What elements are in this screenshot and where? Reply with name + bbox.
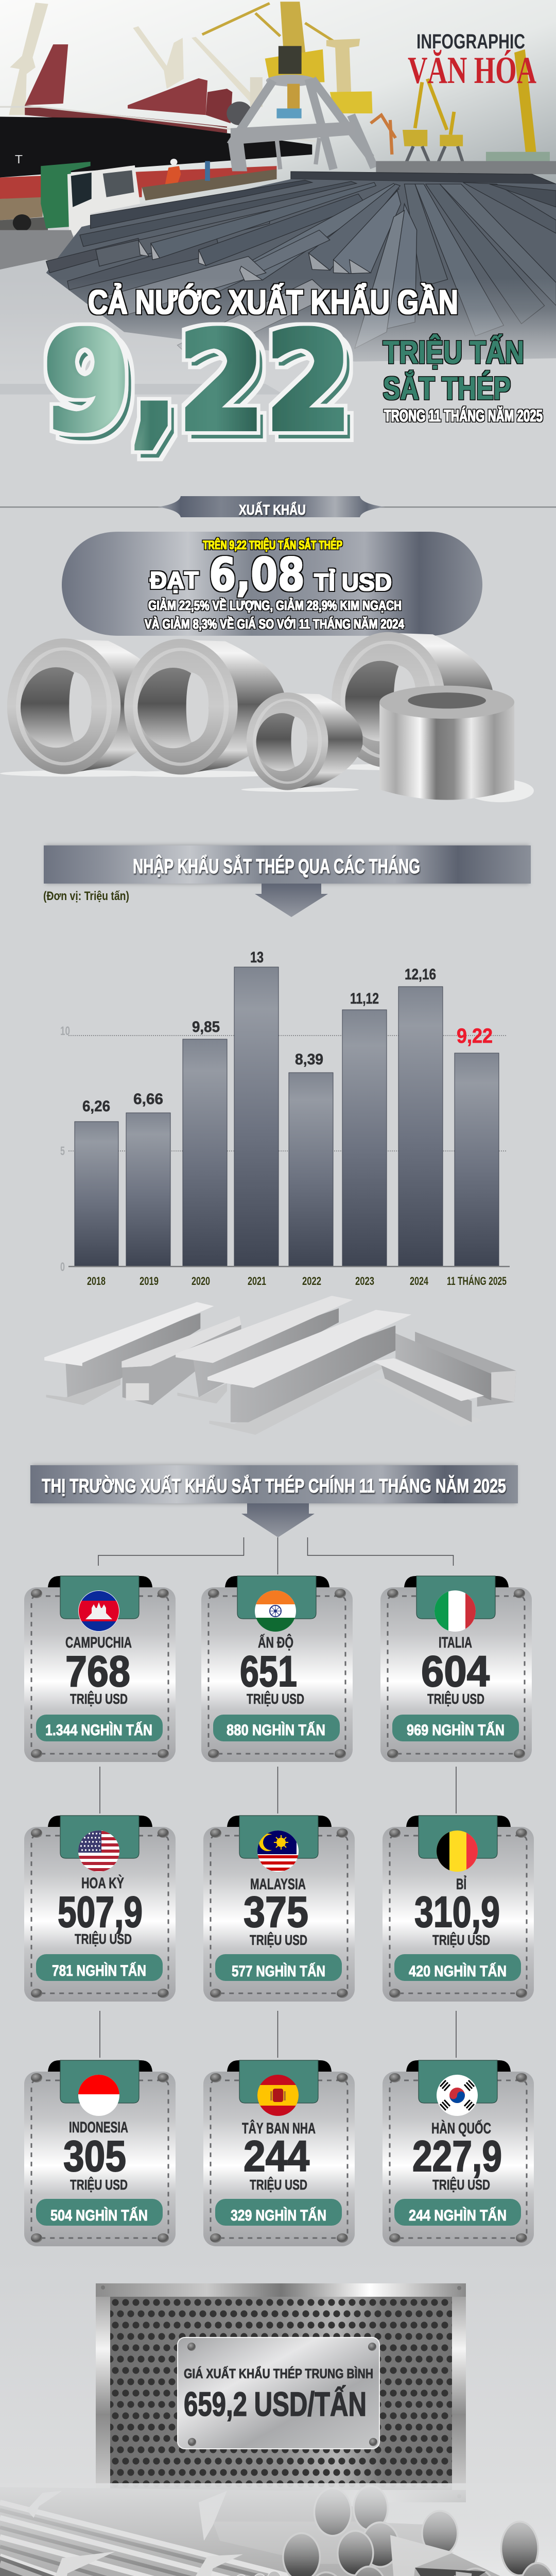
- rod bundle: [222, 2571, 295, 2576]
- card: Hoa Kỳ: 507,9: [58, 1888, 143, 1936]
- section heading: imports by period: [44, 845, 531, 917]
- section heading: imports by period: NHẬP KHẨU SẮT THÉP QUA CÁC THÁNG: [133, 854, 420, 878]
- year labels: [87, 1275, 507, 1287]
- ship: [0, 44, 316, 199]
- unit text: [383, 335, 543, 425]
- card: Hoa Kỳ: 781 NGHÌN TẤN: [52, 1962, 146, 1979]
- flag: India: [255, 1590, 296, 1632]
- section heading: main export markets: [30, 1465, 518, 1537]
- price plate: [178, 2337, 379, 2449]
- illustration: steel beams: [44, 1296, 516, 1435]
- card: Hàn Quốc: [383, 2060, 534, 2246]
- card: Italia: 969 NGHÌN TẤN: [407, 1721, 505, 1739]
- hero photo: steel bars at the port: [0, 0, 556, 395]
- top fade over pipes: [0, 2483, 556, 2571]
- trucks and workers: [0, 159, 276, 273]
- axis labels and grid: 5: [60, 1144, 65, 1158]
- flag: Belgium: [437, 1831, 478, 1872]
- title: CẢ NƯỚC XUẤT KHẨU GẦN: [88, 283, 458, 321]
- price plate: GIÁ XUẤT KHẨU THÉP TRUNG BÌNH: [184, 2366, 373, 2381]
- bar chart: [60, 949, 510, 1287]
- card: Malaysia: 577 NGHÌN TẤN: [232, 1962, 325, 1980]
- card: Italia: TRIỆU USD: [427, 1691, 484, 1707]
- big number 9,22: 9,22: [43, 303, 352, 461]
- value labels: [82, 949, 493, 1115]
- card: Campuchia: CAMPUCHIA: [65, 1634, 132, 1651]
- year labels: 2019: [140, 1275, 159, 1287]
- card: Ấn Độ: 880 NGHÌN TẤN: [227, 1721, 325, 1739]
- unit text: TRIỆU TẤN: [383, 335, 524, 370]
- value labels: 12,16: [405, 966, 436, 983]
- round pipes: [283, 2486, 556, 2576]
- card: Italia: 604: [421, 1647, 490, 1696]
- card: Malaysia: [203, 1816, 355, 2002]
- card: Malaysia: 375: [244, 1888, 308, 1936]
- card: Hoa Kỳ: TRIỆU USD: [75, 1931, 132, 1947]
- flag: South Korea: [437, 2075, 478, 2116]
- panel: export value: ĐẠT: [150, 567, 199, 594]
- port cranes: [202, 2, 556, 174]
- card: Tây Ban Nha: 244: [244, 2132, 309, 2180]
- card: Hàn Quốc: TRIỆU USD: [432, 2177, 490, 2193]
- ship cranes: [9, 3, 263, 115]
- flag: Spain: [257, 2075, 299, 2116]
- year labels: 2024: [410, 1275, 429, 1287]
- section heading: xuất khẩu: XUẤT KHẨU: [239, 502, 306, 518]
- axis labels and grid: [60, 1024, 507, 1274]
- lower background: [0, 2257, 556, 2576]
- value labels: 11,12: [350, 990, 379, 1007]
- year labels: 2022: [302, 1275, 321, 1287]
- panel: export value: TRÊN 9,22 TRIỆU TẤN SẮT THÉP: [203, 538, 342, 552]
- metal straps: [19, 2491, 243, 2576]
- card: Hàn Quốc: 244 NGHÌN TẤN: [409, 2207, 507, 2224]
- card: Tây Ban Nha: [203, 2060, 355, 2246]
- year labels: 2020: [192, 1275, 210, 1287]
- panel: export value: GIẢM 22,5% VỀ LƯỢNG, GIẢM 28,9% KIM NGẠCH: [148, 598, 402, 613]
- panel: export value: TỈ USD: [314, 569, 392, 596]
- title: [43, 283, 543, 461]
- panel: perforated metal frame: [96, 2283, 466, 2502]
- axis labels and grid: 0: [60, 1260, 65, 1274]
- flag: Malaysia: [257, 1831, 299, 1872]
- connector lines: [98, 1537, 456, 2058]
- channel bars: [390, 2535, 486, 2576]
- round bars at back: [0, 2487, 556, 2576]
- card: Indonesia: INDONESIA: [69, 2119, 128, 2136]
- value labels: 9,22: [457, 1025, 493, 1047]
- ship: T: [15, 153, 23, 166]
- value labels: 9,85: [192, 1019, 220, 1036]
- unit text: SẮT THÉP: [383, 371, 511, 406]
- flag: Italy: [435, 1590, 476, 1632]
- left steel bars, rebar and ties: [0, 2556, 305, 2576]
- card: Bỉ: 420 NGHÌN TẤN: [409, 1962, 507, 1980]
- price plate: 659,2 USD/TẤN: [184, 2385, 367, 2423]
- flag: Cambodia: [78, 1590, 119, 1632]
- card: Hoa Kỳ: HOA KỲ: [81, 1874, 124, 1892]
- card: Ấn Độ: TRIỆU USD: [247, 1691, 304, 1707]
- axis labels and grid: 10: [60, 1024, 70, 1038]
- card: Hàn Quốc: HÀN QUỐC: [431, 2120, 491, 2137]
- card: Bỉ: BỈ: [456, 1875, 466, 1893]
- panel: export value: VÀ GIẢM 8,3% VỀ GIÁ SO VỚI 11 THÁNG NĂM 2024: [145, 616, 404, 632]
- illustration: stacked steel pipes and bars: [0, 2486, 556, 2576]
- section heading: xuất khẩu: [0, 496, 556, 518]
- card: Indonesia: 504 NGHÌN TẤN: [50, 2207, 148, 2224]
- steel bars: [0, 172, 556, 395]
- card: Campuchia: [24, 1576, 176, 1762]
- hero fade into background: [0, 278, 556, 384]
- card: Campuchia: TRIỆU USD: [70, 1691, 128, 1707]
- card: Ấn Độ: 651: [240, 1647, 297, 1696]
- panel: export value: [62, 532, 482, 636]
- flag: Indonesia: [78, 2075, 119, 2116]
- card: Tây Ban Nha: TRIỆU USD: [250, 2177, 307, 2193]
- year labels: 2021: [248, 1275, 266, 1287]
- logo: Infographic Văn Hóa: [408, 30, 536, 92]
- card: Bỉ: TRIỆU USD: [432, 1932, 490, 1948]
- value labels: 13: [250, 949, 264, 966]
- card: Hàn Quốc: 227,9: [412, 2132, 502, 2180]
- card: Tây Ban Nha: TÂY BAN NHA: [242, 2120, 316, 2137]
- card: Malaysia: TRIỆU USD: [250, 1932, 307, 1948]
- card: Indonesia: [24, 2060, 176, 2246]
- value labels: 6,26: [82, 1098, 110, 1115]
- unit note: (Đơn vị: Triệu tấn): [43, 889, 129, 903]
- card: Indonesia: 305: [63, 2132, 126, 2180]
- illustration: steel coils: [0, 632, 534, 802]
- card: Ấn Độ: [201, 1576, 353, 1762]
- card: Malaysia: MALAYSIA: [250, 1876, 306, 1893]
- year labels: 2023: [355, 1275, 374, 1287]
- card: Italia: ITALIA: [439, 1634, 472, 1651]
- card: Ấn Độ: ẤN ĐỘ: [258, 1634, 293, 1651]
- card: Hoa Kỳ: [24, 1816, 176, 2002]
- card: Indonesia: TRIỆU USD: [70, 2177, 128, 2193]
- card: Campuchia: 1.344 NGHÌN TẤN: [45, 1721, 152, 1739]
- card: Italia: [380, 1576, 532, 1762]
- card: Bỉ: [383, 1816, 534, 2002]
- card: Tây Ban Nha: 329 NGHÌN TẤN: [231, 2207, 326, 2224]
- panel: export value: 6,08: [209, 548, 305, 601]
- year labels: 2018: [87, 1275, 106, 1287]
- year labels: 11 THÁNG 2025: [447, 1275, 507, 1287]
- value labels: 8,39: [295, 1051, 323, 1068]
- bars: [75, 967, 499, 1266]
- flag: USA: [78, 1831, 119, 1872]
- value labels: 6,66: [133, 1091, 163, 1108]
- card: Campuchia: 768: [65, 1647, 130, 1696]
- card: Bỉ: 310,9: [414, 1888, 500, 1936]
